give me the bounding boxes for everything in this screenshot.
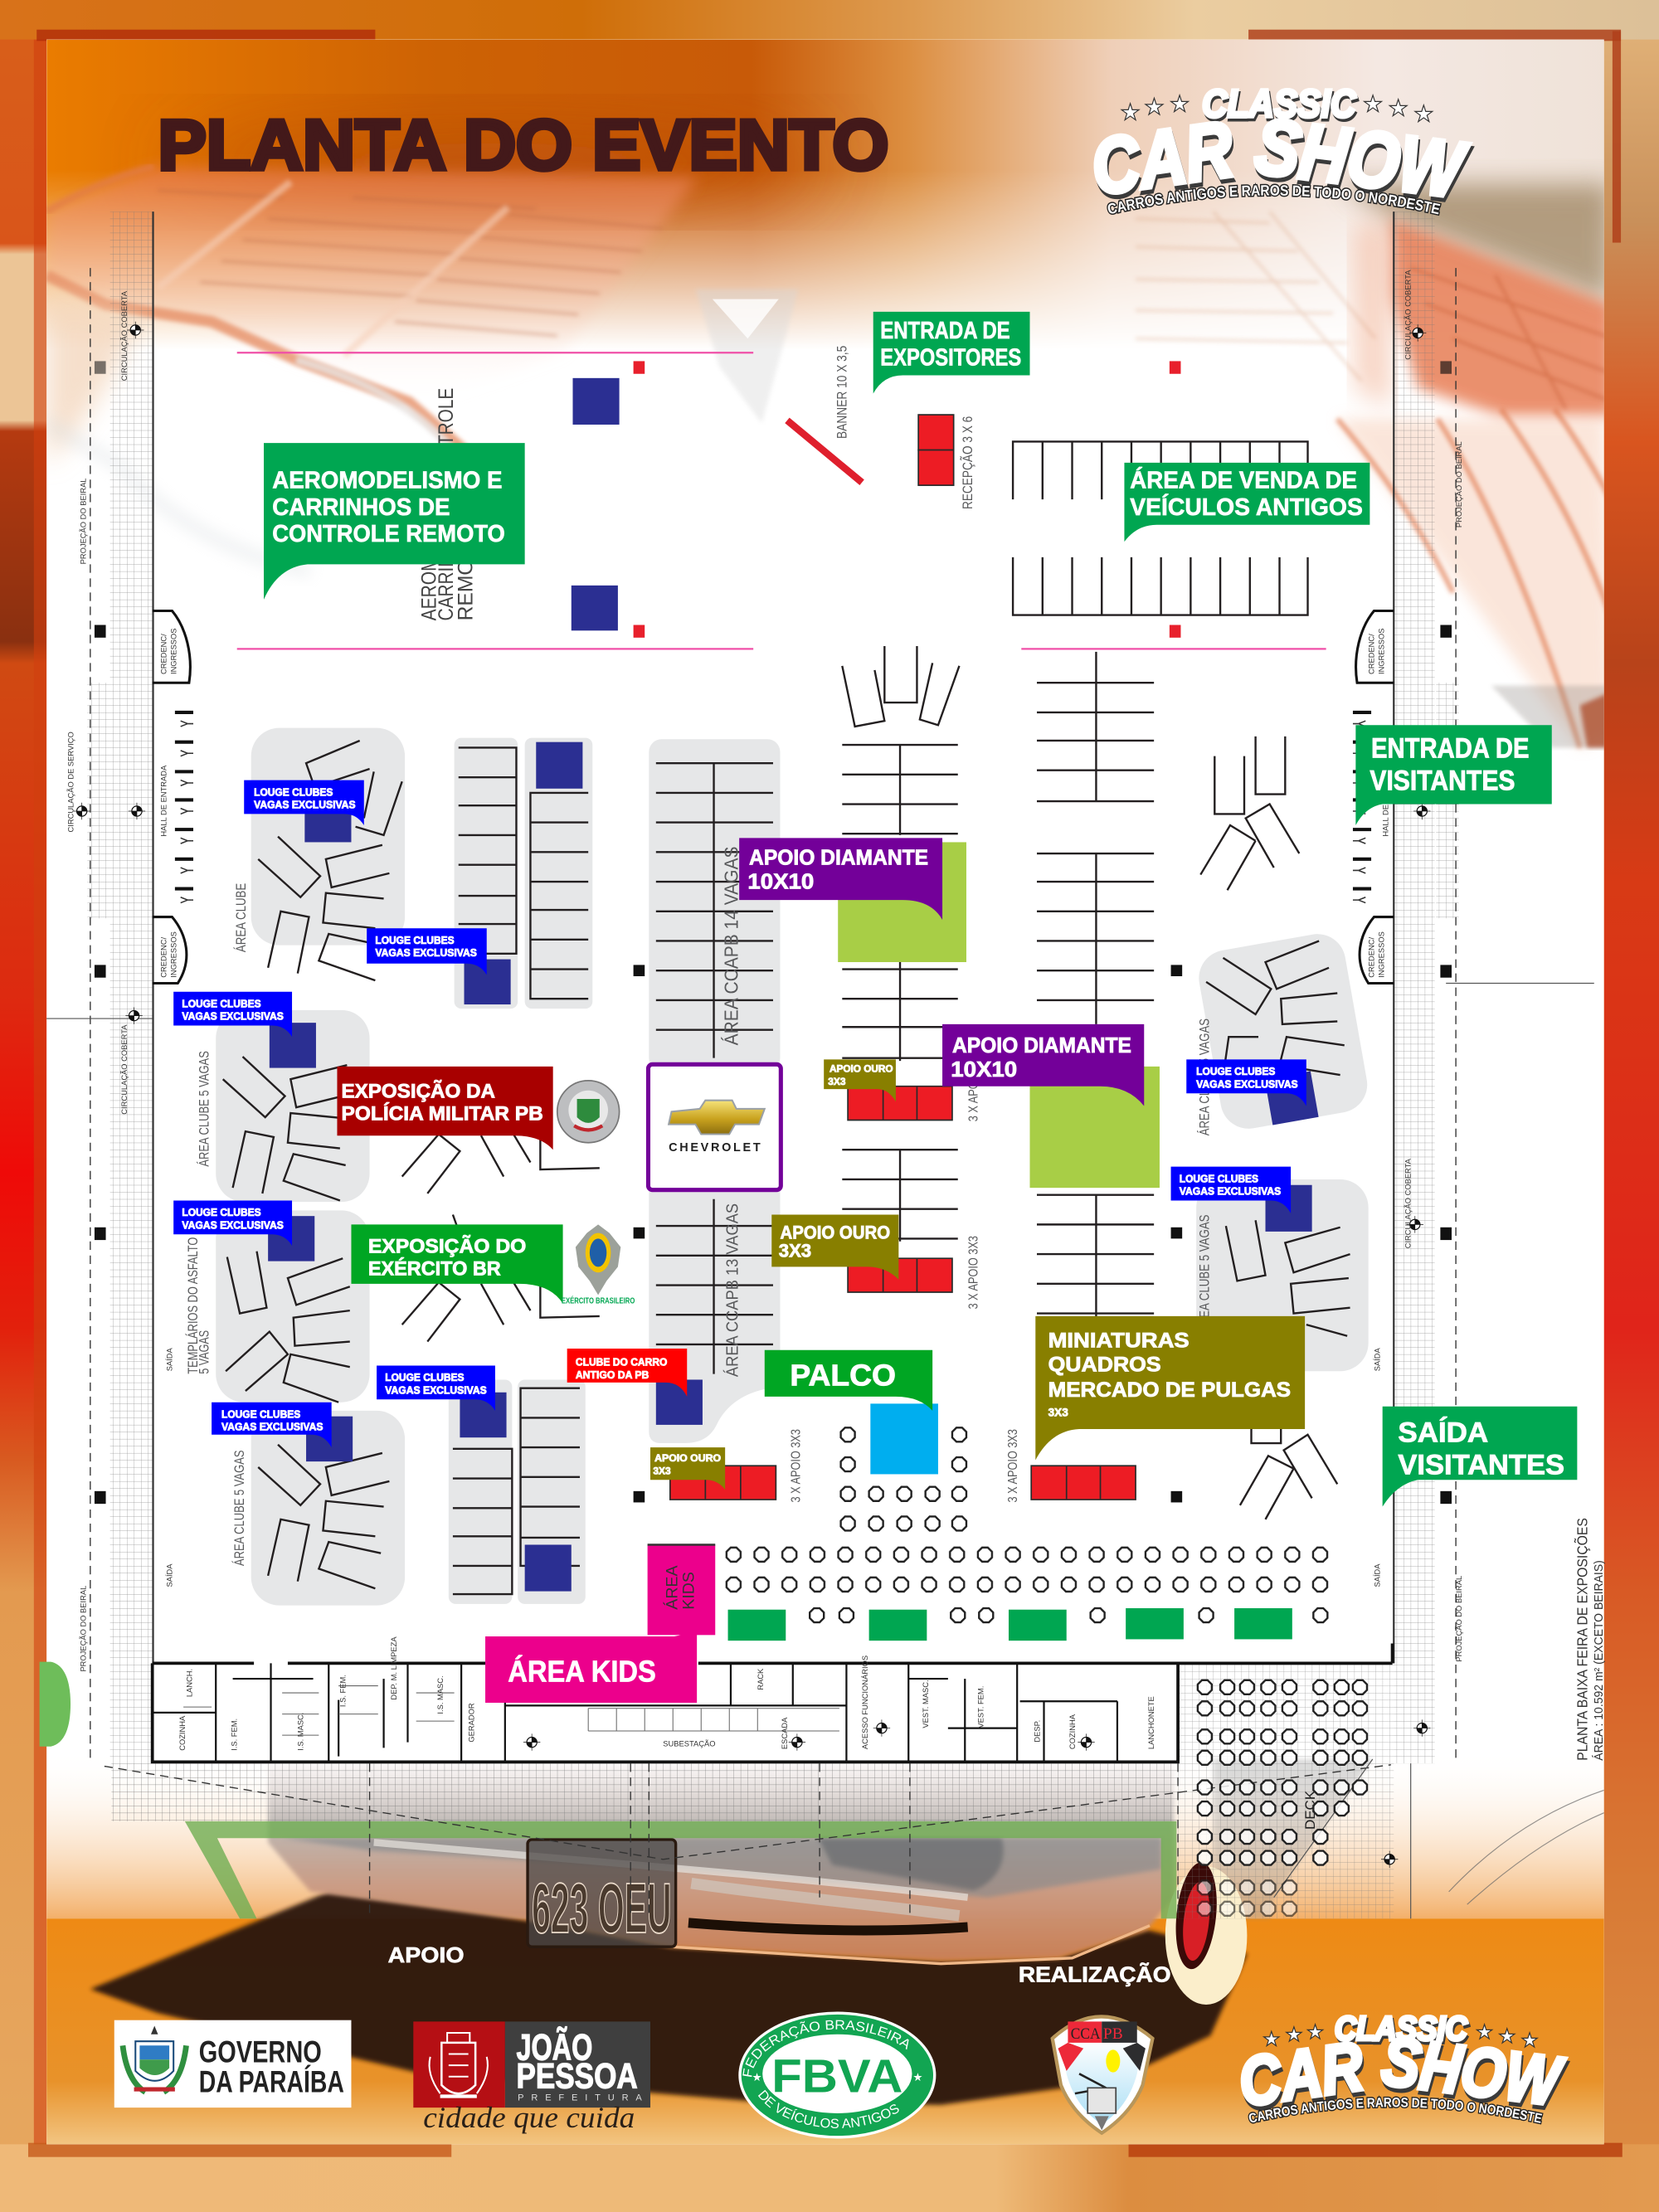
deck tables	[1198, 1680, 1367, 1916]
title: PLANTA DO EVENTO	[158, 106, 888, 185]
logo: Classic Car Show bottom: SHOW	[1378, 2022, 1568, 2121]
license plate	[528, 1840, 676, 1948]
parking stalls	[223, 441, 1350, 1594]
icon: exercito badge: EXÉRCITO BRASILEIRO	[562, 1296, 635, 1306]
labels: lounge clubes: LOUGE CLUBES	[254, 785, 333, 798]
green tab left	[40, 1662, 71, 1747]
blueprint side grids: INGRESSOS	[1377, 628, 1385, 674]
plan: rooms strip	[153, 1636, 1393, 1762]
logo: joao pessoa: PREFEITURA	[518, 2093, 642, 2103]
logo: Classic Car Show top: ★	[1388, 95, 1408, 121]
label: apoio diamante 2	[942, 1024, 1144, 1106]
banner and stand captions: RECEPÇÃO 3 X 6	[959, 416, 975, 509]
banner and stand captions: ÁREA CCAPB 13 VAGAS	[722, 1203, 742, 1377]
entrance doors	[153, 610, 1394, 984]
plan: rooms strip: LANCHONETE	[1147, 1696, 1155, 1749]
plan: rooms strip: ESCADA	[781, 1717, 789, 1749]
logo: FBVA: ★	[752, 2071, 762, 2083]
banner and stand captions: ÁREA CLUBE 5 VAGAS	[197, 1051, 212, 1167]
plan: rooms strip: GERADOR	[467, 1703, 475, 1743]
logo: governo da paraiba: DA PARAÍBA	[199, 2064, 344, 2098]
banner and stand captions: ÁREA CLUBE	[233, 883, 249, 952]
banner and stand captions: 3 X APOIO 3X3	[967, 1048, 981, 1121]
label: clube do carro: ANTIGO DA PB	[576, 1369, 649, 1381]
plan: rooms strip: I.S. MASC.	[436, 1675, 445, 1714]
label: policia militar: POLÍCIA MILITAR PB	[342, 1102, 543, 1125]
roof photo background	[46, 167, 1623, 747]
blue booth squares	[268, 378, 1319, 1592]
logo: Classic Car Show bottom: ★	[1285, 2023, 1303, 2046]
logo: joao pessoa: JOÃO	[516, 2026, 592, 2068]
label: area de venda: ÁREA DE VENDA DE	[1130, 466, 1357, 494]
blueprint side grids: CREDENC/	[1367, 937, 1375, 978]
logo: Classic Car Show bottom: CAR	[1234, 2027, 1368, 2121]
logo: CCAPB: PB	[1103, 2025, 1123, 2043]
heading: realizacao: REALIZAÇÃO	[1019, 1962, 1171, 1987]
label: miniaturas: MERCADO DE PULGAS	[1048, 1379, 1291, 1402]
logo: Classic Car Show bottom: ★	[1262, 2027, 1280, 2050]
plan: rooms strip: I.S. FEM.	[339, 1675, 348, 1707]
blueprint side grids: PROJEÇÃO DO BEIRAL	[1455, 1576, 1463, 1662]
icon: policia militar badge	[557, 1081, 620, 1143]
blueprint side grids: INGRESSOS	[170, 931, 178, 978]
plan caption: ÁREA : 10.592 m² (EXCETO BEIRAIS)	[1592, 1560, 1606, 1761]
heading: apoio: APOIO	[388, 1944, 465, 1967]
blueprint side grids: CREDENC/	[1367, 634, 1375, 674]
banner and stand captions: 5 VAGAS	[197, 1330, 212, 1374]
logo: governo da paraiba: GOVERNO	[199, 2035, 322, 2069]
plan: rooms strip: I.S. MASC.	[297, 1713, 305, 1751]
plan caption: PLANTA BAIXA FEIRA DE EXPOSIÇÕES	[1573, 1518, 1590, 1761]
logo: FBVA: FBVA	[771, 2049, 902, 2102]
label: apoio ouro small 1: APOIO OURO	[830, 1063, 893, 1075]
banner and stand captions: CARRINHOS DE CONTROLE	[435, 388, 458, 620]
label: apoio ouro small 1: 3X3	[828, 1076, 846, 1087]
label: area de venda: VEÍCULOS ANTIGOS	[1130, 493, 1363, 521]
label: saida visitantes: VISITANTES	[1398, 1449, 1564, 1480]
logo: Classic Car Show bottom: CLASSIC	[1336, 2012, 1469, 2050]
blueprint side grids: HALL DE ENTRADA	[160, 765, 168, 837]
labels: lounge clubes: VAGAS EXCLUSIVAS	[375, 946, 477, 959]
blueprint side grids: SAÍDA	[1373, 1347, 1381, 1371]
label: miniaturas: 3X3	[1048, 1407, 1068, 1419]
label: apoio diamante 1: APOIO DIAMANTE	[749, 847, 928, 870]
labels: lounge clubes: LOUGE CLUBES	[182, 997, 261, 1009]
grey lounge and parking areas	[216, 728, 1372, 1606]
label: entrada de expositores	[873, 312, 1029, 394]
logo: Classic Car Show top: ★	[1363, 91, 1383, 117]
red stands	[670, 415, 1136, 1500]
logo: FBVA: ★	[912, 2071, 923, 2083]
logo: FBVA: FEDERAÇÃO BRASILEIRA	[742, 2020, 909, 2077]
banner and stand captions: ÁREA CLUBE 5 VAGAS	[231, 1451, 247, 1566]
label: saida visitantes	[1383, 1407, 1577, 1507]
label: area kids	[485, 1622, 697, 1703]
labels: lounge clubes: VAGAS EXCLUSIVAS	[182, 1010, 284, 1023]
logo: joao pessoa	[413, 2021, 650, 2134]
logo: Classic Car Show top: ★	[1120, 100, 1141, 126]
label: miniaturas: QUADROS	[1048, 1354, 1161, 1376]
blueprint side grids: PROJEÇÃO DO BEIRAL	[1455, 441, 1463, 527]
label: policia militar	[337, 1067, 553, 1150]
labels: lounge clubes: VAGAS EXCLUSIVAS	[221, 1421, 323, 1433]
banner and stand captions: 3 X APOIO 3X3	[789, 1429, 803, 1502]
banner and stand captions: ÁREA CLUBE 5 VAGAS	[1196, 1018, 1212, 1135]
labels: lounge clubes: VAGAS EXCLUSIVAS	[254, 799, 356, 811]
banner and stand captions: 3 X APOIO 3X3	[967, 1236, 981, 1309]
logo: Classic Car Show top	[1087, 82, 1475, 220]
logo: Classic Car Show bottom: CAR	[1236, 2031, 1370, 2125]
blueprint side grids: HALL DE ENTRADA	[1381, 765, 1389, 837]
logo: Classic Car Show top: SHOW	[1252, 106, 1473, 220]
blueprint side grids	[46, 211, 1594, 1918]
logo: Classic Car Show bottom: SHOW	[1379, 2026, 1569, 2125]
plan: rooms strip: COZINHA	[1068, 1714, 1077, 1749]
labels: lounge clubes: VAGAS EXCLUSIVAS	[1180, 1185, 1281, 1198]
labels: lounge clubes: LOUGE CLUBES	[385, 1371, 465, 1383]
blueprint side grids: SAÍDA	[165, 1563, 173, 1587]
logo: FBVA: DE VEÍCULOS ANTIGOS	[758, 2090, 899, 2128]
labels: lounge clubes: VAGAS EXCLUSIVAS	[385, 1383, 487, 1396]
labels: lounge clubes: LOUGE CLUBES	[1180, 1172, 1258, 1184]
plan: rooms strip: DEP. M. LIMPEZA	[390, 1636, 398, 1700]
logo: Classic Car Show top: ★	[1170, 91, 1190, 117]
green deck outline	[185, 1821, 1176, 1918]
label: apoio diamante 1: 10X10	[747, 871, 814, 894]
logo: Classic Car Show bottom: ★	[1520, 2029, 1539, 2052]
logo: Classic Car Show top: CAR	[1087, 105, 1238, 212]
label: apoio ouro 3: 3X3	[653, 1465, 671, 1476]
blueprint side grids: PROJEÇÃO DO BEIRAL	[80, 478, 88, 564]
panel: chevrolet	[648, 1064, 781, 1190]
label: area de venda	[1124, 463, 1370, 542]
labels: lounge clubes: LOUGE CLUBES	[182, 1206, 261, 1218]
labels: lounge clubes	[173, 780, 1306, 1447]
logo: joao pessoa: cidade que cuida	[423, 2101, 635, 2134]
logo: Classic Car Show bottom: CLASSIC	[1335, 2009, 1467, 2047]
label: entrada de expositores: EXPOSITORES	[880, 345, 1021, 372]
label: area kids: ÁREA KIDS	[508, 1655, 656, 1688]
blueprint side grids: CIRCULAÇÃO COBERTA	[1404, 1158, 1413, 1248]
labels: lounge clubes: LOUGE CLUBES	[375, 934, 455, 946]
logo: Classic Car Show bottom: ★	[1476, 2020, 1493, 2044]
logo: Classic Car Show top: ★	[1144, 95, 1165, 120]
logo: Classic Car Show top: CLASSIC	[1202, 82, 1356, 126]
logo: Classic Car Show bottom: CARROS ANTIGOS E RAROS DE TODO O NORDESTE	[1248, 2095, 1544, 2125]
label: policia militar: EXPOSIÇÃO DA	[342, 1079, 495, 1102]
blueprint side grids: SAÍDA	[1373, 1563, 1381, 1587]
pink kids block: KIDS	[680, 1572, 698, 1610]
stage	[870, 1403, 938, 1474]
car body	[268, 1763, 1174, 1961]
banner and stand captions: REMOTO	[455, 532, 478, 620]
blueprint side grids: CIRCULAÇÃO COBERTA	[1404, 270, 1413, 360]
banner and stand captions: TEMPLÁRIOS DO ASFALTO	[185, 1237, 201, 1374]
banner	[787, 421, 862, 483]
logo: Classic Car Show top: CLASSIC	[1204, 85, 1358, 129]
column markers	[95, 361, 1452, 1504]
label: apoio diamante 2: 10X10	[951, 1058, 1017, 1082]
label: entrada de expositores: ENTRADA DE	[880, 318, 1010, 344]
plan: rooms strip: COZINHA	[178, 1715, 187, 1751]
blueprint side grids: CIRCULAÇÃO DE SERVIÇO	[66, 732, 75, 833]
pink boundary lines	[237, 352, 1326, 649]
label: clube do carro: CLUBE DO CARRO	[576, 1355, 667, 1368]
label: exercito	[351, 1224, 563, 1304]
label: entrada de visitantes: ENTRADA DE	[1371, 732, 1530, 764]
pink kids block	[648, 1544, 715, 1635]
apoio diamante green blocks	[838, 842, 1160, 1188]
label: palco: PALCO	[790, 1359, 896, 1392]
labels: lounge clubes: VAGAS EXCLUSIVAS	[1196, 1077, 1298, 1090]
label: aeromodelismo: CARRINHOS DE	[272, 494, 450, 521]
label: exercito: EXÉRCITO BR	[368, 1257, 501, 1281]
banner and stand captions: 3 X APOIO 3X3	[1006, 1429, 1020, 1502]
label: miniaturas	[1035, 1316, 1305, 1460]
banner and stand captions: BANNER 10 X 3,5	[834, 346, 849, 439]
labels: lounge clubes: LOUGE CLUBES	[1196, 1065, 1275, 1077]
label: clube do carro	[567, 1349, 687, 1397]
logo: Classic Car Show bottom: ★	[1498, 2025, 1515, 2048]
label: apoio diamante 1	[739, 838, 942, 920]
plan: rooms strip: I.S. FEM.	[231, 1719, 239, 1751]
blueprint side grids: INGRESSOS	[170, 628, 178, 674]
logo: Classic Car Show top: ★	[1413, 101, 1433, 127]
car shadow	[90, 1892, 1247, 2105]
logo: Classic Car Show top: SHOW	[1251, 102, 1472, 216]
label: apoio ouro 2: 3X3	[779, 1240, 811, 1261]
logo: CCAPB	[1053, 2016, 1152, 2133]
labels: lounge clubes: LOUGE CLUBES	[221, 1407, 300, 1420]
plan: rooms strip: ACESSO FUNCIONÁRIOS	[861, 1655, 869, 1749]
label: apoio ouro 3: APOIO OURO	[654, 1452, 721, 1464]
plan: rooms strip: SUBESTAÇÃO	[663, 1740, 715, 1748]
plan: rooms strip: DESP.	[1033, 1720, 1041, 1743]
deck tables: DECK	[1302, 1790, 1318, 1830]
label: entrada de visitantes: VISITANTES	[1370, 765, 1515, 797]
label: apoio ouro small 1	[824, 1059, 896, 1101]
right roof	[1340, 183, 1613, 304]
label: saida visitantes: SAÍDA	[1398, 1417, 1488, 1448]
blueprint side grids: PROJEÇÃO DO BEIRAL	[80, 1586, 88, 1672]
banner and stand captions: AEROMODELISMO E	[419, 449, 441, 620]
label: apoio ouro 3	[650, 1447, 725, 1490]
tables grid	[720, 1427, 1334, 1622]
label: miniaturas: MINIATURAS	[1048, 1330, 1190, 1352]
bottom orange band and car: 623 OEU	[532, 1869, 672, 1948]
blueprint side grids: CIRCULAÇÃO COBERTA	[120, 290, 129, 381]
blueprint side grids: CREDENC/	[160, 634, 168, 674]
logo: governo da paraiba	[114, 2020, 351, 2107]
bottom orange band and car	[46, 1749, 1604, 2144]
icon: exercito badge	[562, 1224, 635, 1306]
plan: rooms strip: LANCH.	[185, 1669, 193, 1697]
logo: Classic Car Show bottom	[1234, 2009, 1570, 2125]
banner and stand captions: ÁREA CCAPB 14 VAGAS	[720, 847, 742, 1045]
label: apoio ouro 2	[771, 1214, 898, 1280]
plan: rooms strip: RACK	[757, 1668, 765, 1690]
panel: chevrolet: CHEVROLET	[669, 1141, 761, 1155]
blueprint side grids: CREDENC/	[160, 937, 168, 978]
car tire	[1165, 1860, 1247, 2005]
logo: FBVA	[738, 2012, 936, 2138]
logo: Classic Car Show top: CARROS ANTIGOS E RAROS DE TODO O NORDESTE	[1107, 182, 1442, 216]
blueprint side grids: CIRCULAÇÃO COBERTA	[120, 1024, 129, 1115]
label: exercito: EXPOSIÇÃO DO	[368, 1234, 526, 1257]
label: aeromodelismo	[264, 443, 525, 600]
green stands	[728, 1608, 1292, 1641]
banner and stand captions	[185, 346, 1212, 1566]
logo: joao pessoa: PESSOA	[516, 2057, 638, 2096]
label: apoio diamante 2: APOIO DIAMANTE	[952, 1034, 1131, 1057]
label: apoio ouro 2: APOIO OURO	[780, 1222, 890, 1242]
plan caption	[1573, 1518, 1606, 1761]
banner and stand captions: ÁREA CLUBE 5 VAGAS	[1196, 1214, 1212, 1333]
label: palco	[765, 1350, 932, 1411]
label: entrada de visitantes	[1355, 725, 1552, 825]
label: aeromodelismo: CONTROLE REMOTO	[272, 521, 505, 547]
logo: Classic Car Show top: CAR	[1087, 109, 1240, 216]
blueprint side grids: INGRESSOS	[1377, 931, 1385, 978]
blueprint side grids: SAÍDA	[165, 1347, 173, 1371]
logo: CCAPB: CCA	[1071, 2025, 1101, 2043]
plan: rooms strip: VEST. MASC.	[922, 1680, 930, 1728]
labels: lounge clubes: VAGAS EXCLUSIVAS	[182, 1218, 284, 1231]
logo: Classic Car Show bottom: ★	[1306, 2020, 1324, 2044]
plan: rooms strip: VEST. FEM.	[976, 1686, 985, 1728]
label: aeromodelismo: AEROMODELISMO E	[272, 468, 502, 494]
pink kids block: ÁREA	[662, 1565, 681, 1610]
